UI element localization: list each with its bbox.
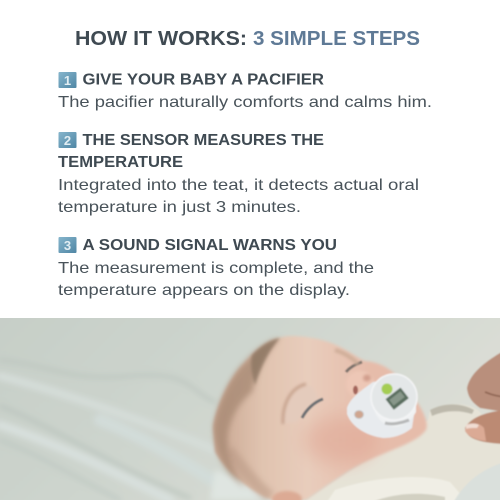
step 1 heading: GIVE YOUR BABY A PACIFIER [82,72,324,88]
hair [214,338,280,488]
icon: keycap 2: 2 [64,133,71,148]
closed eye left [302,399,323,418]
sensor body [412,406,417,416]
icon: keycap 3: 3 [64,238,71,253]
step 3 heading: A SOUND SIGNAL WARNS YOU [82,237,337,254]
icon: keycap 2 [58,132,76,148]
parent hand [465,350,500,444]
clothing [300,404,500,500]
icon: keycap 1: 1 [64,73,71,88]
step 1 [58,72,432,111]
eyelid [283,385,318,424]
baby head [213,336,427,500]
photo: baby with pacifier thermometer [0,310,500,500]
step 2 heading [58,132,324,171]
side label [385,420,409,424]
temple shadow [228,450,270,497]
icon: keycap 1 [58,72,76,88]
title: 3 SIMPLE STEPS [253,28,420,50]
pacifier shield [347,381,414,438]
pacifier thermometer [347,374,417,438]
cheek blush [304,416,376,464]
title [75,28,420,50]
nose [358,373,372,390]
step 3 description: temperature appears on the display. [58,282,350,299]
pacifier ring hole [354,410,364,418]
step 2 [58,132,419,216]
step 3 description: The measurement is complete, and the [58,260,374,277]
step 3 [58,237,374,299]
ear [272,491,302,500]
LCD display [386,388,409,410]
step 2 description: Integrated into the teat, it detects actual oral [58,177,419,194]
step 2 description: temperature in just 3 minutes. [58,199,301,216]
green dot [382,384,392,394]
step 2 heading: THE SENSOR MEASURES THE [82,132,324,149]
step 3 description [58,260,374,299]
title: HOW IT WORKS: [75,28,247,50]
step 1 description: The pacifier naturally comforts and calms him. [58,94,432,111]
icon: keycap 3 [58,237,76,253]
eye right [346,362,362,372]
step 2 heading: TEMPERATURE [58,154,183,171]
bedding background [0,310,500,500]
step 2 description [58,177,419,216]
pacifier button [371,374,417,420]
